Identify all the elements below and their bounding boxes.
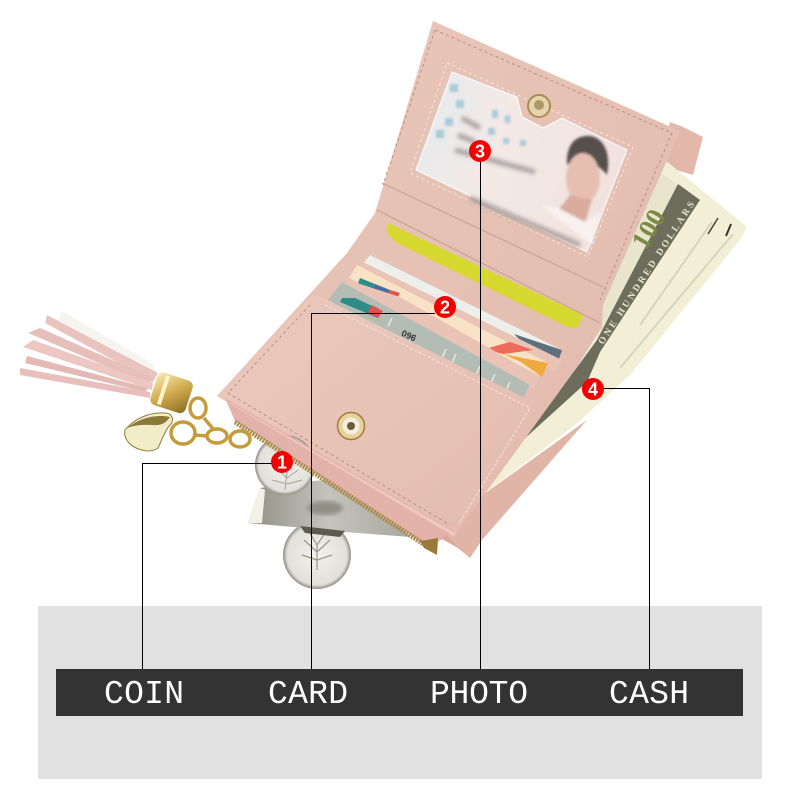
banknote face [600,172,700,352]
white card [358,255,562,362]
card bars [388,318,510,391]
card number: 960 [400,328,418,343]
pocket strip one [355,262,562,372]
heart charm [125,413,172,451]
banknote in pocket [248,478,410,537]
banknote value: 100 [625,204,671,254]
cream card [349,265,548,377]
marker 1: 1 [277,452,287,472]
back panel under cash [447,420,587,558]
card logo [358,278,375,291]
label bar [56,669,743,716]
flap lower edge [217,396,455,537]
label: coin: COIN [104,676,184,713]
marker 4 [582,378,604,400]
pocket strip two [340,280,540,389]
label: cash: CASH [609,676,689,713]
marker 1 [271,451,293,473]
id card blurred text [436,84,526,146]
marker 2 [434,296,456,318]
slot creases [377,183,603,323]
cash bundle [478,160,747,497]
marker 2: 2 [440,298,450,318]
wallet illustration [217,21,747,558]
back wallet strip [660,122,703,175]
snap tab [528,95,550,117]
second coin [283,521,351,589]
banknote legend: ONE HUNDRED DOLLARS [597,200,697,347]
chain links [171,398,250,447]
marker 4: 4 [588,380,598,400]
id portrait [540,136,608,245]
card stripes [485,342,533,354]
zipper pocket [225,398,470,558]
background band [38,606,762,779]
grey card [328,282,530,400]
snap button [338,412,364,440]
first coin [255,435,315,495]
tassel cap [149,371,194,415]
photo window [410,63,633,257]
label: card: CARD [268,676,348,713]
yellow card [387,223,583,328]
upper panel stitching [383,30,672,300]
wallet body [217,21,680,535]
marker 3: 3 [475,142,485,162]
label: photo: PHOTO [430,676,528,713]
marker 3 [469,140,491,162]
tassel charm [20,311,250,451]
front pocket [217,295,535,535]
leader lines [142,160,650,670]
